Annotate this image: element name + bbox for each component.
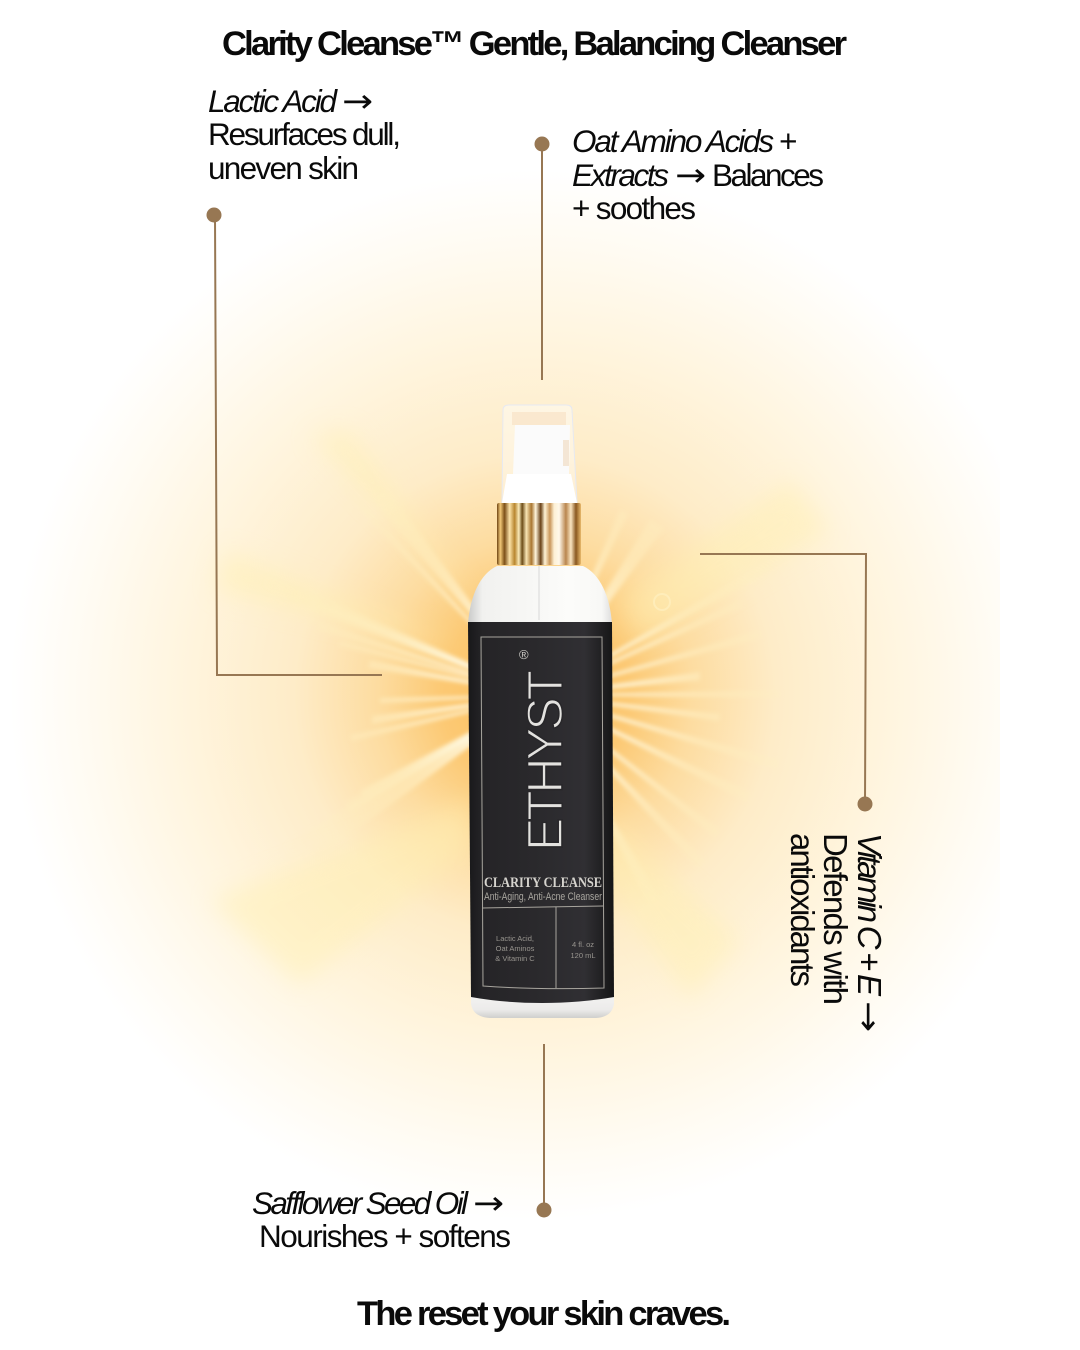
callout text: safflower seed oil: Nourishes + softens [259, 1218, 511, 1254]
callout text: lactic acid: Resurfaces dull, [208, 116, 401, 152]
black label: Anti-Aging, Anti-Acne Cleanser [484, 891, 602, 903]
callout text: vitamin c + e: Defends with [817, 833, 854, 1005]
callout: vitamin c + e [700, 554, 888, 1032]
label details: 4 fl. oz [572, 940, 594, 949]
callout text: oat amino acids: Balances [712, 157, 824, 193]
callout text: lactic acid: uneven skin [208, 150, 359, 186]
callout text: lactic acid: Lactic Acid [208, 83, 338, 119]
connector: vitamin c + e [700, 554, 872, 812]
product bottle [468, 405, 614, 1018]
connector: lactic acid [206, 208, 382, 675]
callout text: oat amino acids: Extracts [572, 157, 669, 193]
bottle clear cap and pump [502, 405, 577, 503]
black label: ® [519, 647, 529, 662]
gold collar [497, 503, 581, 565]
product name: CLARITY CLEANSE [484, 875, 602, 891]
label details: & Vitamin C [495, 954, 535, 963]
black label [468, 622, 614, 1003]
tagline: The reset your skin craves. [357, 1295, 731, 1333]
callout text: oat amino acids: + soothes [572, 190, 696, 226]
label details: 120 mL [570, 951, 596, 960]
callout: oat amino acids [534, 123, 824, 380]
label details [495, 934, 596, 963]
bottle shoulder and base [468, 566, 614, 1018]
connector: safflower seed oil [536, 1044, 552, 1218]
callout text: oat amino acids: Oat Amino Acids + [572, 123, 797, 159]
callout text: oat amino acids: → [675, 156, 706, 194]
callout text: safflower seed oil: → [473, 1184, 504, 1222]
label details: Lactic Acid, [496, 934, 534, 943]
callout text: vitamin c + e: Vitamin C + E [851, 833, 888, 997]
callout text: safflower seed oil: Safflower Seed Oil [252, 1185, 469, 1221]
callout text: oat amino acids [572, 123, 824, 226]
callout text: lactic acid [208, 82, 401, 186]
background glow with rays [56, 216, 1000, 1174]
brand name: ETHYST [517, 670, 573, 851]
callout: lactic acid [206, 82, 401, 675]
callout text: lactic acid: → [342, 82, 373, 120]
label details: Oat Aminos [496, 944, 535, 953]
callout text: vitamin c + e: antioxidants [784, 833, 821, 987]
callout: safflower seed oil [252, 1044, 552, 1254]
connector: oat amino acids [534, 136, 550, 380]
callout text: vitamin c + e: → [850, 1001, 888, 1032]
title: Clarity Cleanse™ Gentle, Balancing Cleanser [222, 25, 847, 63]
callout text: vitamin c + e [784, 833, 888, 1032]
callout text: safflower seed oil [252, 1184, 511, 1254]
